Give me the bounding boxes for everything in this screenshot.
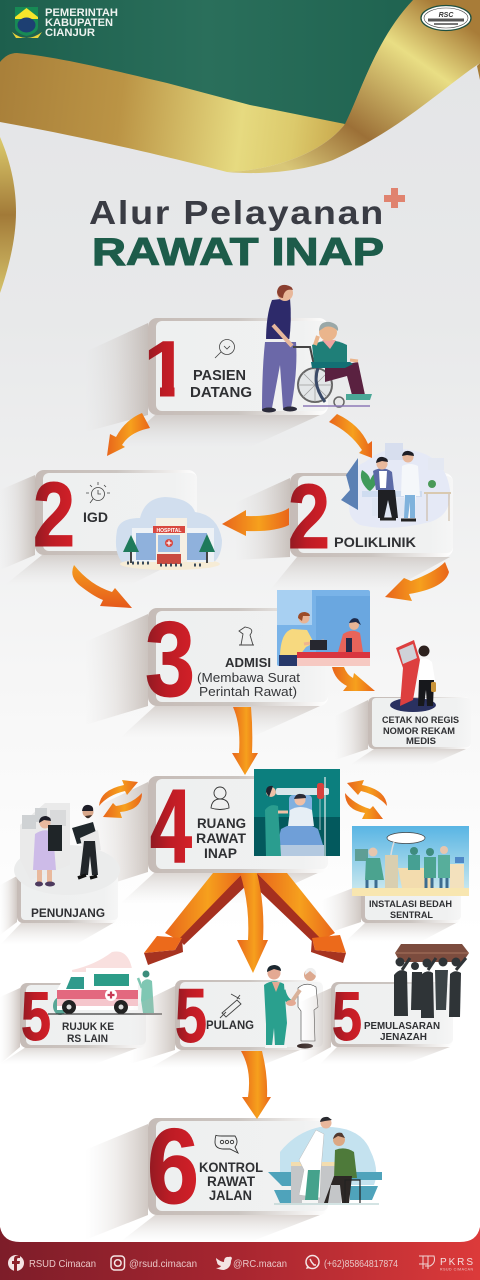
title line 2: RAWAT INAP xyxy=(92,231,384,274)
icon: instagram xyxy=(111,1256,124,1270)
illustration: outpatient check-up xyxy=(268,1117,382,1204)
card 6 xyxy=(85,1118,328,1242)
label xyxy=(382,715,459,746)
label: NOMOR REKAM xyxy=(383,726,455,736)
arrow: ruang rawat inap to rujuk xyxy=(144,873,250,965)
arrow: pasien datang to IGD xyxy=(107,413,150,456)
panel: step 2 IGD xyxy=(0,464,222,585)
arrow: IGD to admisi xyxy=(72,565,132,608)
icon: facebook xyxy=(8,1255,24,1271)
label: PEMULASARAN xyxy=(364,1021,440,1032)
icon: whatsapp xyxy=(306,1256,319,1269)
label xyxy=(199,1160,263,1203)
panel: instalasi bedah sentral xyxy=(322,826,469,942)
icon: person outline xyxy=(211,787,229,810)
label: IGD xyxy=(83,509,108,525)
panel: step 3 admisi xyxy=(85,590,370,738)
illustration: admission counter xyxy=(277,590,370,666)
card 4 xyxy=(85,776,328,904)
label xyxy=(197,656,300,699)
card pulang xyxy=(130,980,323,1068)
label: INSTALASI BEDAH xyxy=(369,899,452,909)
number 4: 4 xyxy=(150,768,192,885)
card jenazah xyxy=(300,982,453,1064)
label: CETAK NO REGIS xyxy=(382,715,459,725)
institution name: KABUPATEN xyxy=(45,17,113,29)
label: PULANG xyxy=(206,1018,254,1032)
card poliklinik xyxy=(235,473,453,590)
label: RAWAT xyxy=(207,1174,256,1189)
label: ADMISI xyxy=(225,656,271,670)
illustration: ambulance xyxy=(48,951,162,1015)
arrow: pulang to kontrol xyxy=(241,1051,271,1119)
arrows: ruang rawat inap and bedah sentral xyxy=(345,780,387,819)
whatsapp xyxy=(306,1256,398,1270)
arrow: pasien datang to poliklinik xyxy=(329,414,372,458)
label: RUANG xyxy=(197,816,246,831)
panel: step 6 kontrol rawat jalan xyxy=(85,1106,382,1242)
illustration: x-ray examination xyxy=(14,803,120,895)
instagram xyxy=(111,1256,197,1270)
label: JALAN xyxy=(209,1188,252,1203)
illustration: doctor and patient xyxy=(341,443,451,528)
PKRS subtext: RSUD CIMACAN xyxy=(440,1268,473,1272)
arrow: poliklinik to admisi xyxy=(385,562,449,601)
illustration: caregiver and patient in wheelchair xyxy=(262,285,372,412)
icon: PKRS mark xyxy=(419,1256,434,1269)
label: RUJUK KE xyxy=(62,1021,114,1033)
label: SENTRAL xyxy=(390,910,434,920)
card 3 xyxy=(85,608,328,738)
arrow: ruang rawat inap to pemulasaran xyxy=(250,873,346,963)
arrow: admisi to cetak xyxy=(332,667,375,691)
panel: step 5 pulang xyxy=(130,965,323,1068)
phone number: (+62)85864817874 xyxy=(324,1259,398,1270)
institution name: CIANJUR xyxy=(45,27,95,39)
arrow: admisi to ruang rawat inap xyxy=(232,707,258,775)
twitter xyxy=(216,1257,287,1270)
illustration: registration kiosk xyxy=(390,640,436,712)
number 2: 2 xyxy=(288,466,330,568)
institution name: PEMERINTAH xyxy=(45,7,118,19)
icon: chess knight xyxy=(239,627,254,645)
card cetak xyxy=(335,697,471,765)
illustration: hospital building: HOSPITAL xyxy=(157,528,181,534)
card IGD xyxy=(0,470,197,585)
gold ribbon xyxy=(0,0,480,293)
label: RAWAT xyxy=(196,831,247,846)
icon: twitter xyxy=(216,1257,232,1270)
card penunjang xyxy=(0,870,118,945)
panel: step 5 rujuk ke rs lain xyxy=(0,951,162,1064)
label: POLIKLINIK xyxy=(334,535,416,550)
number 6: 6 xyxy=(147,1106,199,1226)
title xyxy=(89,188,405,274)
illustration: pallbearers with coffin xyxy=(394,944,469,1018)
icon: Cianjur coat of arms xyxy=(12,7,42,38)
number 5: 5 xyxy=(175,974,207,1059)
number 5: 5 xyxy=(21,978,51,1055)
handle: RSUD Cimacan xyxy=(29,1259,96,1270)
panel: step 2 poliklinik xyxy=(235,443,453,590)
illustration: doctor and patient handshake xyxy=(264,965,318,1048)
PKRS text: PKRS xyxy=(440,1257,473,1268)
label: (Membawa Surat xyxy=(197,670,300,685)
arrow: poliklinik to IGD xyxy=(222,508,289,536)
arrows: ruang rawat inap and penunjang xyxy=(99,780,142,818)
label xyxy=(369,899,452,920)
number 5: 5 xyxy=(332,978,362,1055)
government logo and name xyxy=(12,7,118,39)
panel: step 5 pemulasaran jenazah xyxy=(300,944,469,1064)
label: INAP xyxy=(204,846,237,861)
arrow: ruang rawat inap to pulang xyxy=(237,873,268,973)
number 3: 3 xyxy=(145,599,195,719)
illustration: inpatient room xyxy=(254,769,340,856)
label: PASIEN xyxy=(193,368,246,384)
label xyxy=(364,1021,440,1043)
RSC logo xyxy=(421,6,471,30)
label: JENAZAH xyxy=(380,1032,427,1043)
icon: bulb with clock xyxy=(86,482,110,503)
label: RS LAIN xyxy=(67,1033,108,1045)
RSC logo: RSC xyxy=(439,12,454,19)
card 1 xyxy=(85,318,328,447)
title line 1: Alur Pelayanan xyxy=(89,194,385,231)
header green banner xyxy=(0,0,414,125)
number 1: 1 xyxy=(144,324,188,413)
label: MEDIS xyxy=(406,736,436,746)
icon: plus xyxy=(384,188,405,208)
label: KONTROL xyxy=(199,1160,263,1175)
number 2: 2 xyxy=(33,464,75,566)
footer xyxy=(0,1227,480,1280)
label: DATANG xyxy=(190,385,252,401)
institution name xyxy=(45,7,118,39)
panel: step 4 ruang rawat inap xyxy=(85,768,340,904)
panel: cetak no regis xyxy=(335,640,471,765)
label xyxy=(62,1021,114,1045)
label xyxy=(196,816,247,861)
card rujuk xyxy=(0,983,146,1064)
handle: @RC.macan xyxy=(233,1259,287,1270)
label: PENUNJANG xyxy=(31,908,105,920)
PKRS logo xyxy=(419,1256,473,1272)
card bedah xyxy=(322,880,461,942)
handle: @rsud.cimacan xyxy=(129,1259,197,1270)
panel: step 1 pasien datang xyxy=(106,284,372,435)
icon: syringe xyxy=(220,994,241,1018)
icon: magnifier xyxy=(215,340,234,358)
icon: speech bubble xyxy=(215,1135,238,1153)
facebook xyxy=(8,1255,96,1271)
illustration: hospital building xyxy=(116,497,222,570)
illustration: operating room xyxy=(352,826,469,896)
panel: penunjang xyxy=(0,803,120,945)
label: Perintah Rawat) xyxy=(199,684,297,699)
label xyxy=(190,368,252,401)
